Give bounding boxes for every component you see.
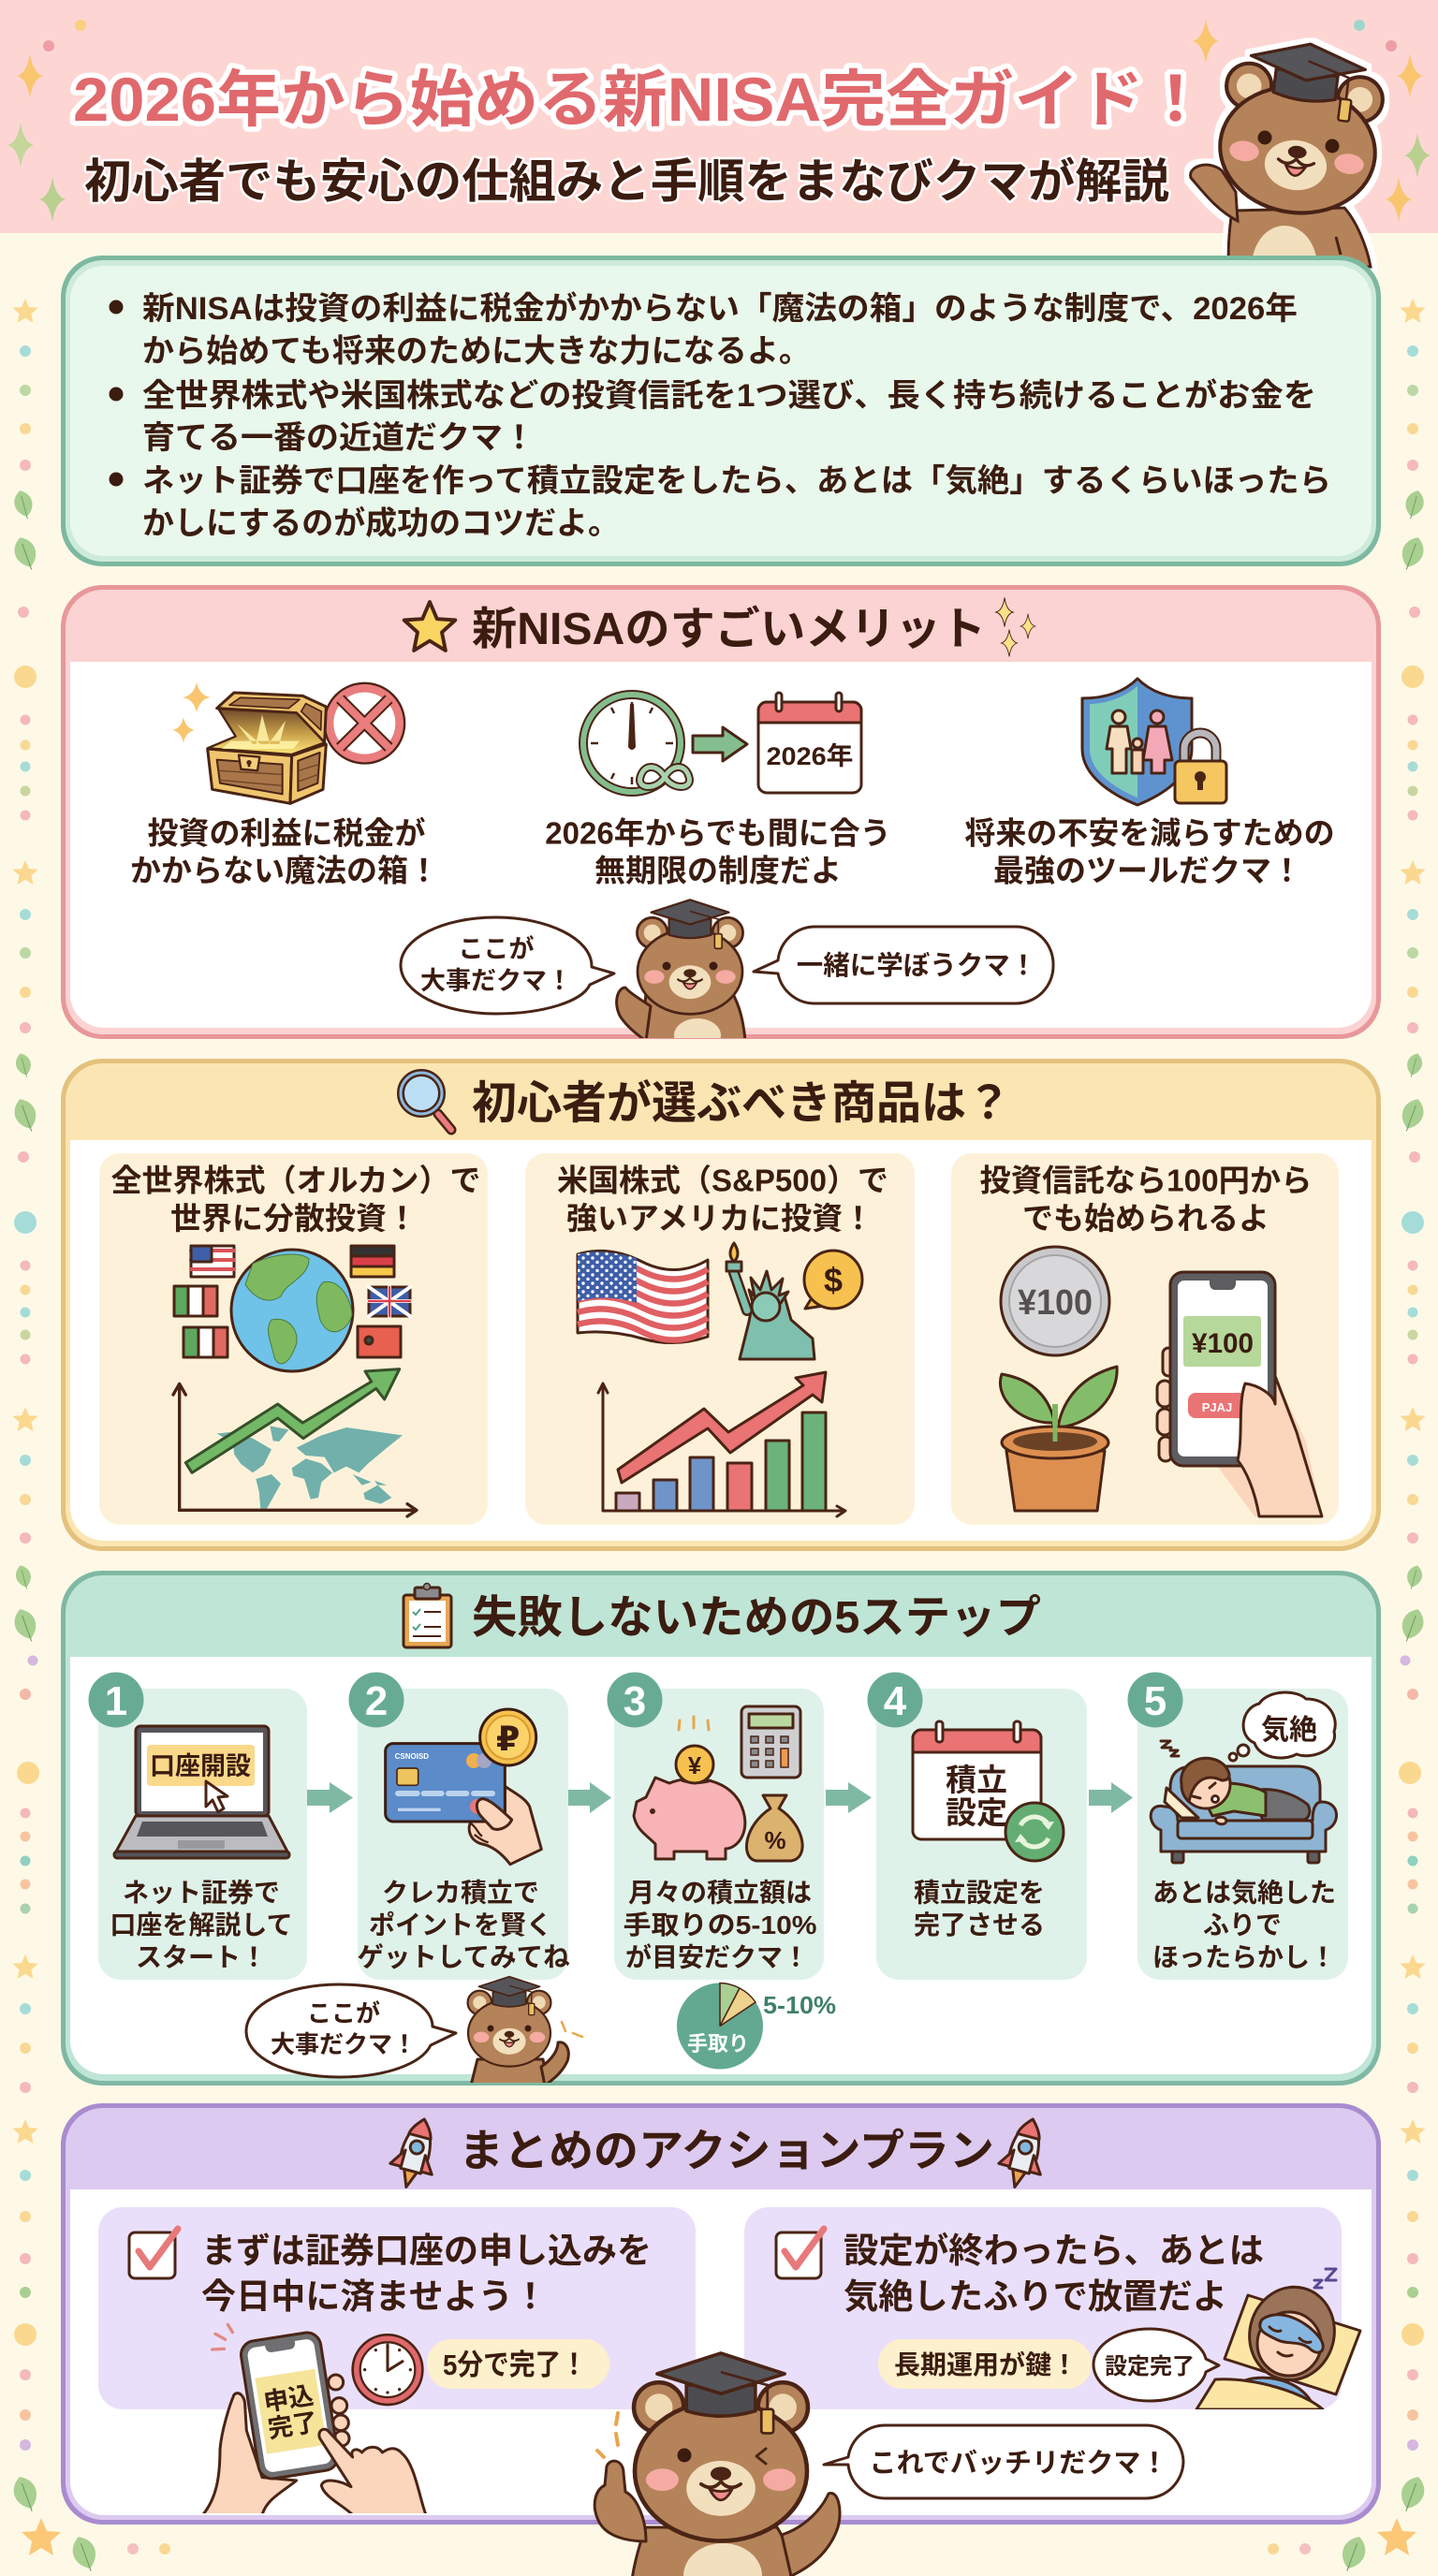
merit 3 text — [964, 816, 1335, 887]
calendar year label: 2026年 — [766, 742, 854, 770]
holding hand and tapping hand — [203, 2331, 426, 2515]
speech bubble: important: 大事だクマ！ — [271, 2030, 417, 2058]
card: US: 米国株式（S&P500）で — [557, 1163, 888, 1198]
icon: zzz — [1314, 2269, 1336, 2288]
step 1: ネット証券で — [123, 1879, 280, 1908]
action card 1 — [98, 2207, 696, 2409]
icon: dollar coin: $ — [824, 1261, 843, 1299]
icon: calendar with refresh: 積立 — [946, 1763, 1007, 1797]
pie chart: take-home share — [677, 1983, 836, 2069]
action card 2: 気絶したふりで放置だよ — [844, 2277, 1227, 2316]
summary bullet 3: ネット証券で口座を作って積立設定をしたら、あとは「気絶」するくらいほったら — [142, 463, 1331, 499]
checkbox — [129, 2229, 178, 2278]
card: US — [525, 1153, 915, 1525]
step 3: 手取りの5-10% — [624, 1910, 817, 1939]
card: all-world: 世界に分散投資！ — [170, 1201, 418, 1236]
icon: rocket right — [994, 2114, 1053, 2192]
action card 2 — [744, 2207, 1360, 2409]
card: 100 yen: でも始められるよ — [1022, 1201, 1269, 1236]
panel: summary — [61, 256, 1381, 566]
arrow 4-5 — [1089, 1782, 1133, 1813]
pill: long-term: 長期運用が鍵！ — [894, 2349, 1078, 2379]
pill: long-term — [878, 2339, 1092, 2389]
merit 1 text — [130, 816, 439, 887]
spark lines — [213, 2324, 232, 2349]
side decorations right — [1268, 299, 1429, 2575]
speech bubble left: 大事だクマ！ — [420, 967, 572, 995]
icon: US flag — [578, 1251, 708, 1343]
arrow 2-3 — [568, 1782, 611, 1813]
icon: piggy bank, calculator, money bag: ¥ — [688, 1751, 702, 1779]
step 2: ポイントを賢く — [369, 1910, 552, 1939]
icon: star — [404, 602, 455, 651]
icon: phone in hand: ¥100 — [1192, 1328, 1254, 1359]
merit 2 text: 無期限の制度だよ — [594, 854, 842, 887]
step 3: が目安だクマ！ — [625, 1942, 809, 1972]
icon: laptop: 口座開設 — [150, 1752, 251, 1780]
icon: clipboard — [404, 1584, 451, 1647]
icon: sleeping on sofa — [1151, 1692, 1337, 1863]
action card 2: 設定が終わったら、あとは — [844, 2232, 1264, 2270]
icon: calendar with refresh — [913, 1721, 1064, 1861]
icon: 100 yen coin — [1001, 1247, 1109, 1355]
step 1 — [88, 1672, 307, 1980]
merit 2 text: 2026年からでも間に合う — [545, 816, 891, 850]
icon: credit card and coin: CSNOISD — [395, 1752, 429, 1761]
icon: sleeping woman — [1196, 2277, 1360, 2409]
merit 1 text: 投資の利益に税金が — [148, 816, 425, 850]
step 5 — [1127, 1672, 1348, 1980]
pill: 5 minutes — [427, 2339, 609, 2389]
icon: laptop — [114, 1726, 289, 1858]
icon: piggy bank, calculator, money bag — [634, 1706, 802, 1861]
flags — [174, 1246, 410, 1357]
card: 100 yen: 投資信託なら100円から — [979, 1163, 1313, 1198]
card: all-world: 全世界株式（オルカン）で — [110, 1163, 481, 1198]
panel: five steps — [61, 1571, 1381, 2086]
step 4: 4 — [884, 1678, 907, 1724]
speech bubble: setting done: 設定完了 — [1105, 2354, 1195, 2379]
icon: credit card and coin: ₽ — [496, 1719, 520, 1759]
icon: magnifier — [401, 1073, 451, 1130]
speech bubble: all set — [824, 2425, 1183, 2498]
summary bullet 1: 新NISAは投資の利益に税金がかからない「魔法の箱」のような制度で、2026年 — [142, 290, 1298, 327]
checkbox — [776, 2229, 824, 2278]
step 2: ゲットしてみてね — [357, 1943, 570, 1973]
mascot bear waving in header — [1191, 35, 1388, 308]
side decorations left — [9, 299, 170, 2575]
icon: shield family and lock — [1082, 679, 1226, 805]
subtitle: 初心者でも安心の仕組みと手順をまなびクマが解説 — [84, 155, 1169, 208]
title: 2026年から始める新NISA完全ガイド！ — [73, 65, 1208, 134]
step 1: 口座を解説して — [110, 1910, 293, 1939]
step 2: クレカ積立で — [382, 1879, 539, 1908]
summary bullet 3 — [109, 463, 1331, 541]
speech bubble left: ここが — [459, 934, 534, 963]
pill: 5 minutes: 5分で完了！ — [443, 2349, 587, 2381]
heading: merits: 新NISAのすごいメリット — [472, 605, 986, 654]
step 4 — [867, 1672, 1087, 1980]
step 1: 1 — [105, 1678, 127, 1724]
icon: sleeping on sofa: 気絶 — [1261, 1715, 1317, 1746]
speech bubble: setting done — [1093, 2329, 1219, 2401]
speech bubble: all set: これでバッチリだクマ！ — [869, 2449, 1168, 2479]
panel: action plan — [61, 2103, 1381, 2576]
action card 1: 今日中に済ませよう！ — [201, 2277, 548, 2316]
icon: sparkles — [996, 597, 1035, 656]
step 3 — [607, 1672, 824, 1980]
panel: merits — [61, 585, 1381, 1052]
chart: world growth — [173, 1369, 417, 1516]
icon: sprout in pot — [1000, 1367, 1117, 1511]
holding hand and tapping hand: 申込 — [262, 2381, 315, 2417]
heading: steps: 失敗しないための5ステップ — [472, 1593, 1041, 1643]
arrow 1-2 — [307, 1782, 353, 1813]
icon: phone in hand: PJAJ — [1202, 1400, 1232, 1414]
step 5: 5 — [1144, 1678, 1167, 1724]
card: US: 強いアメリカに投資！ — [566, 1201, 873, 1236]
merit 2 text — [545, 816, 891, 887]
merit 3 text: 最強のツールだクマ！ — [993, 854, 1302, 887]
summary bullet 1 — [109, 290, 1298, 370]
bear with bubbles — [617, 900, 745, 1052]
step 2 — [348, 1672, 570, 1980]
icon: 100 yen coin: ¥100 — [1018, 1283, 1093, 1323]
summary bullet 2: 全世界株式や米国株式などの投資信託を1つ選び、長く持ち続けることがお金を — [142, 377, 1316, 414]
arrow 3-4 — [826, 1782, 872, 1813]
step 5: ほったらかし！ — [1152, 1943, 1336, 1972]
step 2: 2 — [365, 1678, 388, 1724]
icon: phone in hand — [1157, 1272, 1322, 1516]
speech bubble: important: ここが — [307, 1999, 380, 2027]
step 3: 3 — [624, 1678, 646, 1724]
step 4: 完了させる — [914, 1910, 1045, 1939]
card: all-world — [99, 1153, 488, 1525]
speech bubble left — [401, 917, 614, 1014]
header band — [0, 0, 1438, 233]
step 3: 月々の積立額は — [628, 1879, 812, 1908]
summary bullet 3: かしにするのが成功のコツだよ。 — [142, 505, 620, 541]
icon: rocket left — [386, 2114, 445, 2192]
speech bubble right — [754, 927, 1053, 1003]
speech bubble: important — [246, 1984, 456, 2077]
merit 1 text: かからない魔法の箱！ — [130, 854, 439, 887]
summary bullet 2 — [109, 377, 1316, 456]
merit 3 text: 将来の不安を減らすための — [964, 816, 1335, 850]
big bear thumbs up — [594, 2353, 840, 2576]
step 1: スタート！ — [136, 1943, 267, 1972]
speech bubble right: 一緒に学ぼうクマ！ — [797, 951, 1036, 981]
icon: statue of liberty — [726, 1243, 814, 1359]
chart: US bars and rising arrow — [598, 1372, 845, 1516]
card: 100 yen — [951, 1153, 1339, 1525]
summary bullet 1: から始めても将来のために大きな力になるよ。 — [142, 334, 811, 370]
step 4: 積立設定を — [914, 1879, 1045, 1908]
icon: phone application with hands and clock — [203, 2324, 426, 2515]
icon: piggy bank, calculator, money bag: % — [764, 1826, 786, 1854]
icon: dollar coin — [804, 1251, 862, 1309]
action card 1: まずは証券口座の申し込みを — [201, 2232, 652, 2270]
icon: calendar with refresh: 設定 — [946, 1795, 1007, 1830]
icon: clock infinity and calendar — [583, 693, 861, 793]
header sparkles — [7, 19, 1431, 222]
heading: products: 初心者が選ぶべき商品は？ — [472, 1078, 1011, 1129]
bear in steps panel — [468, 1977, 582, 2086]
step 5: あとは気絶した — [1152, 1879, 1336, 1908]
step 5: ふりで — [1203, 1910, 1282, 1939]
panel: products — [61, 1059, 1381, 1551]
clock — [353, 2334, 422, 2405]
pie chart: take-home share: 手取り — [687, 2032, 749, 2056]
icon: treasure chest with no-tax mark — [172, 682, 404, 803]
icon: credit card and coin — [386, 1709, 541, 1865]
summary bullet 2: 育てる一番の近道だクマ！ — [142, 420, 536, 456]
pie chart: take-home share: 5-10% — [763, 1991, 836, 2019]
icon: globe — [231, 1250, 353, 1371]
heading: action plan: まとめのアクションプラン — [459, 2126, 994, 2175]
holding hand and tapping hand: 完了 — [266, 2408, 319, 2443]
